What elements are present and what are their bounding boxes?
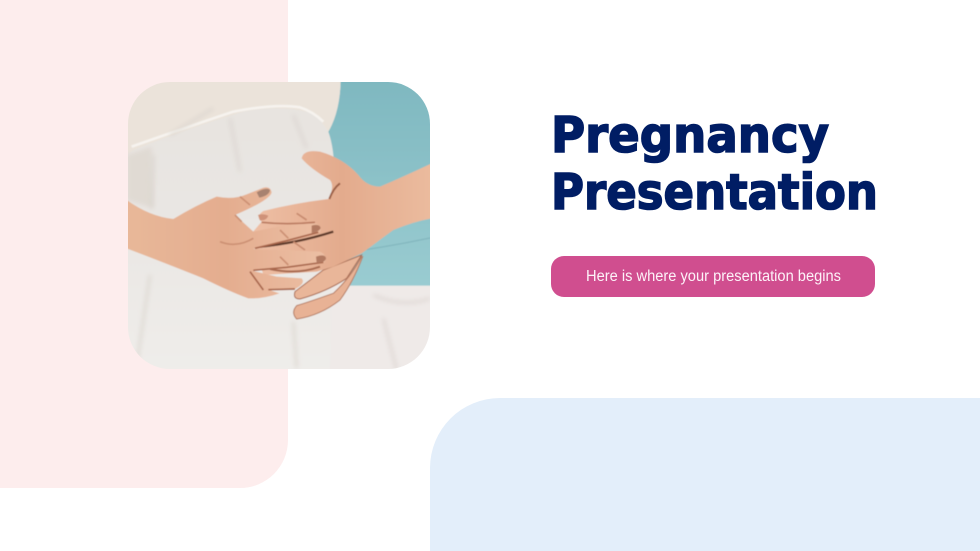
partner arm and hand [252,151,432,319]
background panel: pink [0,0,288,488]
dress shaded left edge [128,148,151,206]
partner nail and knuckles [258,214,268,220]
dress waist tie [132,106,323,147]
title: Pregnancy [551,107,829,164]
partner white trousers [349,285,430,289]
dress folds [137,126,298,366]
title [551,107,878,221]
woman finger creases [250,232,323,290]
fingernails [257,189,270,198]
photo: hands on pregnant belly [127,80,432,370]
subtitle text: Here is where your presentation begins [586,268,841,285]
dress upper bodice [338,86,341,106]
title: Presentation [551,164,878,221]
background panel: blue [430,398,980,551]
partner hand [252,151,432,275]
white dress [326,88,340,157]
woman arm and hand [127,187,326,298]
partner lower fingers [294,255,362,299]
subtitle pill [551,256,875,297]
partner teal shirt [327,80,432,288]
